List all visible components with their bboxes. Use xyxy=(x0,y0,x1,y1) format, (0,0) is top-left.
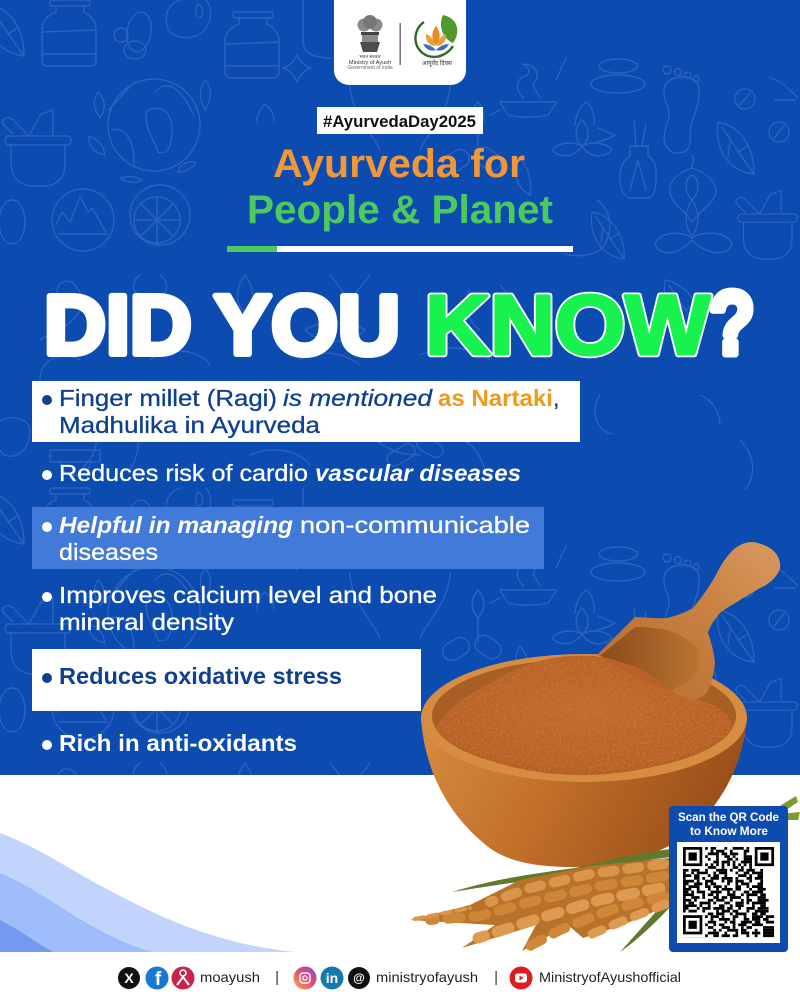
illustration: leaves of the rice stalk xyxy=(452,796,800,952)
emblem caption: Ministry of Ayush xyxy=(349,60,391,66)
bullet: anti-oxidants: Rich in anti-oxidants xyxy=(59,730,297,756)
bullet: oxidative stress xyxy=(32,649,421,711)
icon: linkedin: in xyxy=(326,970,338,986)
heading: did you know: ? xyxy=(709,274,755,374)
handle: moayush: moayush xyxy=(200,969,260,985)
bullet: finger millet: as Nartaki xyxy=(438,385,553,411)
icon: threads xyxy=(348,967,370,989)
title: People & Planet xyxy=(247,188,553,232)
bullet: cardio vascular xyxy=(42,460,521,486)
title underline xyxy=(227,246,573,252)
icon: ayurveda day logo: आयुर्वेद दिवस xyxy=(422,59,453,67)
bullet: finger millet: Finger millet (Ragi) xyxy=(59,385,277,411)
title: Ayurveda for xyxy=(273,142,525,186)
heading: did you know: DID YOU xyxy=(44,278,400,372)
icon: koo style app xyxy=(172,966,194,990)
bullet: cardio vascular: Reduces risk of cardio xyxy=(59,460,308,486)
icon: facebook xyxy=(146,966,168,990)
bullet: non-communicable diseases: Helpful in managing xyxy=(59,512,293,538)
illustration: millet flour mound xyxy=(436,656,733,775)
handle: ministryofayush: ministryofayush xyxy=(376,969,478,985)
icon: national emblem xyxy=(358,15,382,52)
bullet: cardio vascular: vascular diseases xyxy=(315,460,521,486)
bullet: oxidative stress: Reduces oxidative stress xyxy=(59,663,342,689)
heading: did you know: KNOW xyxy=(425,278,711,372)
bullet: non-communicable diseases: non-communicable xyxy=(300,512,530,538)
emblem caption: भारत सरकार xyxy=(359,54,381,59)
icon: threads: @ xyxy=(353,971,365,985)
icon: facebook: f xyxy=(155,969,162,990)
bullet: finger millet: , xyxy=(553,385,559,411)
QR heading xyxy=(678,812,779,838)
bullet: calcium: mineral density xyxy=(59,609,235,635)
illustration: wooden scoop xyxy=(597,542,780,700)
QR code xyxy=(683,847,774,937)
bullet: calcium: Improves calcium level and bone xyxy=(59,582,437,608)
bullet: finger millet: is mentioned xyxy=(283,385,433,411)
wave decoration bottom left xyxy=(0,833,296,952)
social media footer xyxy=(118,966,681,990)
handle: ministryofayushofficial: MinistryofAyushofficial xyxy=(539,969,681,985)
icon: x xyxy=(118,967,140,989)
hashtag label xyxy=(317,107,483,134)
bullet: non-communicable diseases: diseases xyxy=(59,539,158,565)
heading: did you know xyxy=(44,274,755,374)
benefits list xyxy=(32,381,580,756)
heading: did you know: KNOW xyxy=(425,278,711,372)
header logo card xyxy=(334,0,466,85)
illustration: golden rice grains xyxy=(410,858,670,951)
bullet: calcium xyxy=(42,582,437,635)
bullet: finger millet xyxy=(32,381,580,442)
bullet: finger millet: Madhulika in Ayurveda xyxy=(59,412,320,438)
hashtag label: #AyurvedaDay2025 xyxy=(323,112,476,131)
blue background panel xyxy=(0,0,800,775)
title xyxy=(247,142,553,232)
background pattern of ayurveda line icons xyxy=(0,0,798,775)
icon: youtube xyxy=(510,966,532,990)
emblem caption xyxy=(347,54,393,71)
icon: x: X xyxy=(124,970,134,986)
QR code panel xyxy=(669,806,788,952)
QR heading: Scan the QR Code xyxy=(678,812,779,824)
icon: instagram xyxy=(294,966,316,990)
QR heading: to Know More xyxy=(690,826,768,838)
icon: linkedin xyxy=(320,966,344,990)
illustration: wooden bowl xyxy=(421,654,747,867)
bullet: non-communicable diseases xyxy=(32,507,544,569)
emblem caption: Government of India xyxy=(347,65,393,71)
